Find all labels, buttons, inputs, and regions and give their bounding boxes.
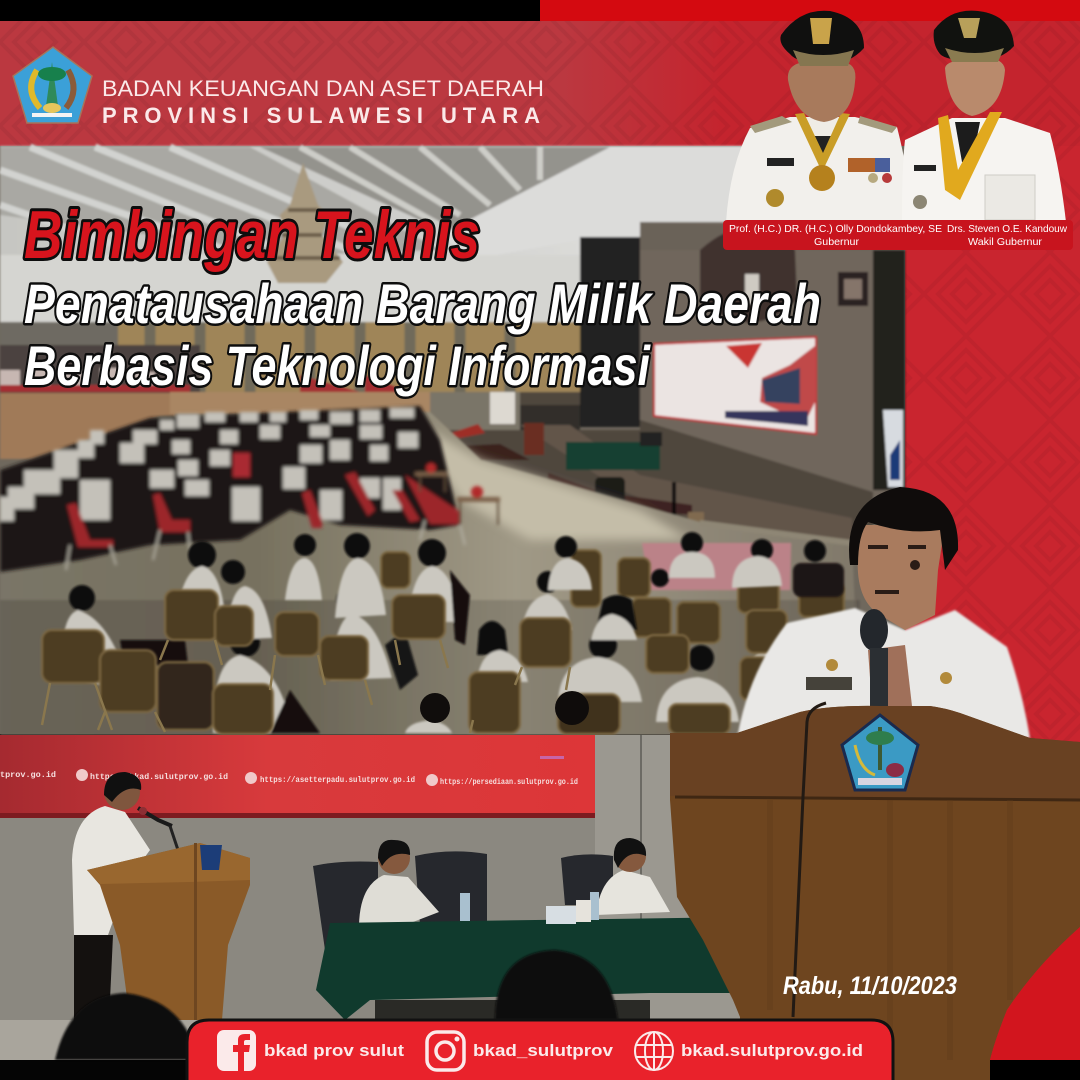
front chairs: row front: [42, 590, 787, 734]
screen url text: tprov.go.id: [0, 770, 56, 780]
icon: instagram: [427, 1032, 464, 1070]
floor: [0, 412, 860, 735]
icon: facebook: [217, 1030, 256, 1071]
governor name: Prof. (H.C.) DR. (H.C.) Olly Dondokambey, SE: [729, 223, 942, 235]
screen url text: [0, 770, 578, 787]
footer social bar: [187, 1020, 893, 1080]
main photo: hall with audience: [0, 146, 905, 735]
title: Bimbingan Teknis: Bimbingan Teknis: [24, 197, 480, 273]
panel chairs: [313, 851, 613, 950]
table: [316, 892, 745, 1022]
speaker close-up with podium: [670, 487, 1080, 1080]
screen url text: https://asetterpadu.sulutprov.go.id: [260, 775, 415, 785]
subtitle line 2: Berbasis Teknologi Informasi: [24, 334, 651, 397]
date: Rabu, 11/10/2023: [783, 972, 957, 1000]
right side red panel: [880, 140, 1080, 1070]
header text: [102, 76, 544, 128]
title group: [24, 197, 821, 397]
label: instagram: bkad_sulutprov: [473, 1041, 614, 1060]
vice governor name: Drs. Steven O.E. Kandouw: [947, 223, 1067, 235]
province name: PROVINSI SULAWESI UTARA: [102, 103, 540, 128]
vice governor title: Wakil Gubernur: [968, 236, 1043, 248]
panel officials: [359, 838, 670, 927]
chandelier: [267, 163, 343, 283]
LED screen: [0, 735, 595, 818]
speaker head: [858, 525, 945, 630]
red corner swoosh: [990, 927, 1080, 1060]
governor title: Gubernur: [814, 236, 860, 248]
portrait: vice governor: [902, 11, 1066, 222]
label: website: bkad.sulutprov.go.id: [681, 1041, 863, 1060]
screen url text: https://persediaan.sulutprov.go.id: [440, 777, 578, 787]
speaker shirt: [738, 608, 1030, 738]
small tables with flowers: [415, 463, 500, 525]
far audience block: [0, 406, 500, 572]
header band: [0, 0, 1080, 146]
front chairs: row back: [381, 550, 844, 643]
wall and stage: [430, 392, 873, 545]
audience heads foreground: [55, 950, 618, 1060]
screen url text: https://bkad.sulutprov.go.id: [90, 772, 228, 782]
portrait caption bar: [723, 220, 1073, 250]
podium: [670, 706, 1080, 1080]
projector screen: [654, 337, 816, 434]
chair legs: [42, 640, 570, 733]
speaker hair: [849, 487, 958, 570]
subtitle line 1: Penatausahaan Barang Milik Daerah: [24, 272, 821, 335]
icon: globe: [635, 1032, 673, 1070]
podium emblem: [842, 715, 918, 790]
audience people: [62, 532, 844, 733]
hall architecture: [0, 146, 905, 735]
microphone: [860, 609, 888, 706]
bottom photo: [0, 735, 745, 1060]
label: facebook: bkad prov sulut: [264, 1041, 404, 1060]
speaker face details: [868, 545, 926, 594]
lectern: [87, 843, 250, 1020]
logo emblem: [13, 47, 92, 123]
agency name: BADAN KEUANGAN DAN ASET DAERAH: [102, 76, 544, 101]
speaker at lectern: [72, 772, 178, 1036]
red chairs: [67, 472, 460, 547]
garuda wall emblem: [700, 228, 797, 322]
portrait: governor: [726, 11, 914, 222]
